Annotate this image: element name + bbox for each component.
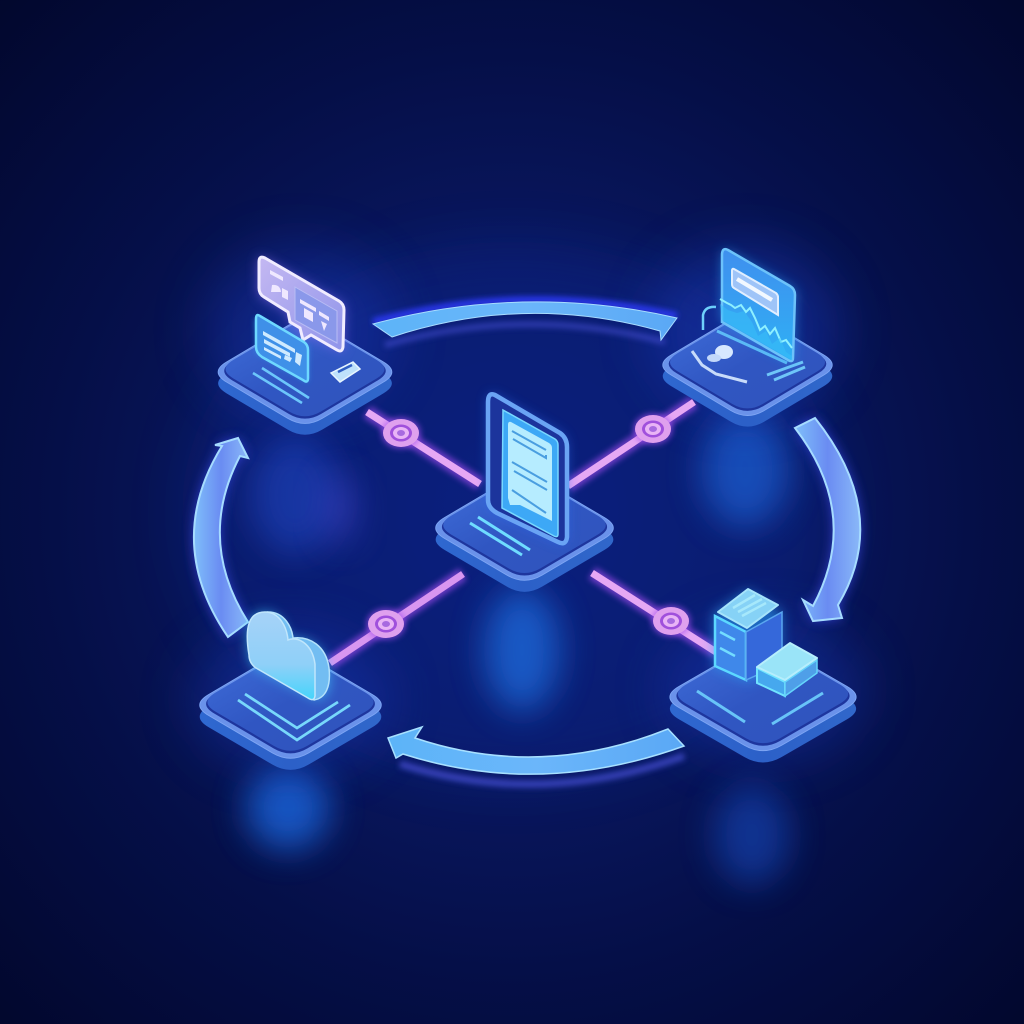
node: top-right platform with chart screen — [663, 249, 832, 427]
arrow: top arc — [373, 300, 677, 345]
node: center platform with document tablet — [436, 394, 613, 592]
node: bottom-right platform with servers — [670, 589, 856, 762]
icon: chart screen — [720, 249, 795, 363]
icon: cloud — [247, 612, 330, 700]
icon: server tower — [713, 589, 782, 682]
icon: hook handle — [703, 307, 716, 330]
platform lines — [253, 368, 309, 403]
node: top-left platform with chat panels — [218, 256, 392, 435]
icon: tablet — [488, 394, 567, 543]
glow reflections on floor — [182, 242, 865, 885]
platform lines — [697, 691, 823, 724]
icon: small box — [757, 643, 817, 696]
node: bottom-left platform with cloud — [200, 612, 381, 770]
connector: bottom-right — [592, 573, 716, 652]
connector: top-left — [367, 412, 480, 484]
connector: top-right — [568, 402, 694, 486]
icon: lavender speech bubble panel — [259, 256, 344, 352]
platform bars — [717, 331, 805, 380]
platform lines — [470, 517, 530, 555]
arrow: left arc — [194, 438, 248, 637]
platform chevrons — [238, 694, 350, 740]
icon: blob and pen — [692, 345, 747, 382]
icon: small chip — [331, 362, 360, 382]
arrow: right arc — [795, 418, 860, 621]
arrow: bottom arc — [388, 727, 684, 784]
connector: bottom-left — [330, 574, 463, 663]
icon: cyan chat panel — [255, 315, 308, 382]
